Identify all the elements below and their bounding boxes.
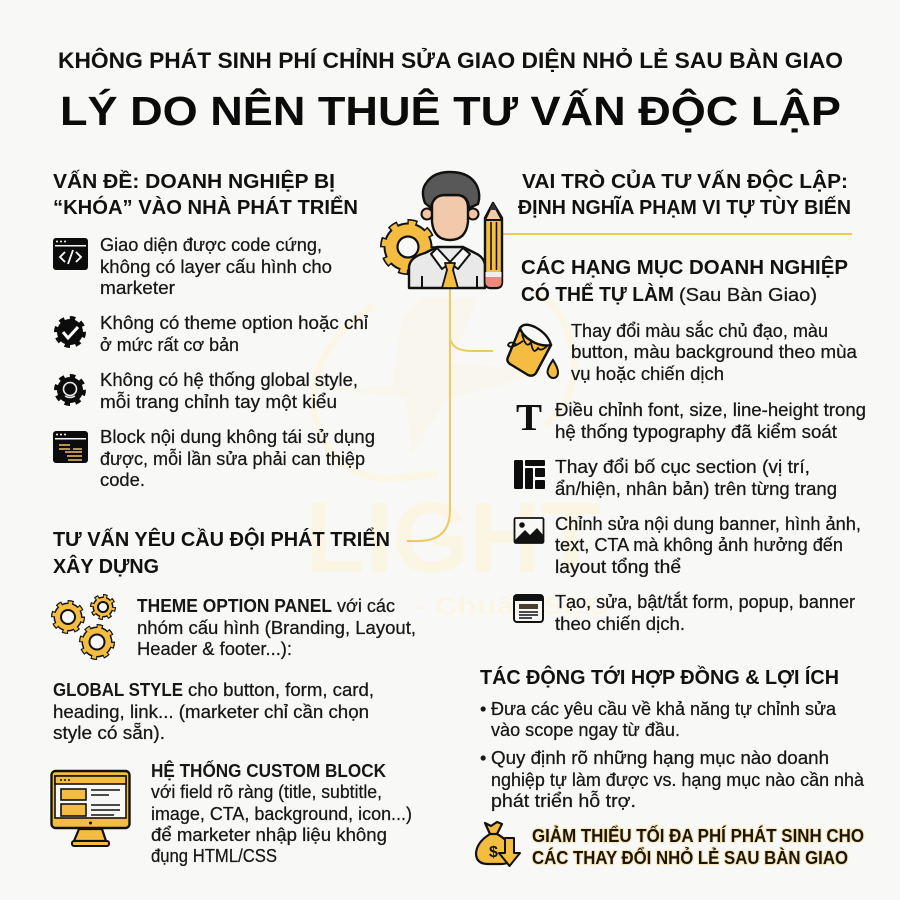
icon: paint bucket xyxy=(507,325,558,378)
watermark: brand logo xyxy=(305,290,610,620)
text: custom block system: để marketer nhập liệu không xyxy=(151,825,387,845)
text: custom block system: đụng HTML/CSS xyxy=(151,846,277,866)
text: hard-coded interface: không có layer cấu hình cho xyxy=(100,257,332,277)
text: banner content: text, CTA mà không ảnh hưởng đến xyxy=(555,535,843,555)
icon: money bag with down arrow: $ xyxy=(489,844,498,861)
bullet list: contract benefits: phát triển hỗ trợ. xyxy=(491,790,636,811)
text: theme option panel xyxy=(137,596,416,659)
heading: self-service items: (Sau Bàn Giao) xyxy=(679,285,817,305)
bullet list: contract benefits: • xyxy=(480,699,486,719)
text: no theme option: ở mức rất cơ bản xyxy=(100,335,239,355)
text: non-reusable blocks: code. xyxy=(100,470,145,490)
text: colours: vụ hoặc chiến dịch xyxy=(571,364,724,384)
icon: desktop monitor xyxy=(52,771,130,846)
text: theme option panel: Header & footer...): xyxy=(137,639,292,659)
heading: problem: VẤN ĐỀ: DOANH NGHIỆP BỊ xyxy=(53,169,335,193)
text: colours xyxy=(571,320,858,384)
text: global style: GLOBAL STYLE xyxy=(53,680,183,700)
icon: block layout window xyxy=(53,431,88,463)
watermark: brand logo: LIGHT xyxy=(305,482,601,594)
text: hard-coded interface: marketer xyxy=(100,278,175,298)
icon: gear support xyxy=(56,376,84,404)
text: colours: button, màu background theo mùa xyxy=(571,342,858,362)
text: global style: cho button, form, card, xyxy=(188,680,374,700)
text: custom block system xyxy=(151,760,412,866)
title: KHÔNG PHÁT SINH PHÍ CHỈNH SỬA GIAO DIỆN NHỎ LẺ SAU BÀN GIAO xyxy=(58,48,843,73)
text: hard-coded interface: Giao diện được code cứng, xyxy=(100,235,322,255)
callout: reduce extra fees: CÁC THAY ĐỔI NHỎ LẺ SAU BÀN GIAO xyxy=(532,847,848,868)
title: LÝ DO NÊN THUÊ TƯ VẤN ĐỘC LẬP xyxy=(60,88,841,134)
text: hard-coded interface xyxy=(100,235,332,298)
connector lines xyxy=(407,234,852,541)
icon: three gears xyxy=(54,596,114,658)
icon: layout grid xyxy=(514,460,545,489)
heading: dev team requirements: TƯ VẤN YÊU CẦU ĐỘI PHÁT TRIỂN xyxy=(53,527,390,551)
icon: money bag with down arrow xyxy=(476,822,520,866)
title xyxy=(58,48,843,134)
heading: consultant role xyxy=(518,169,851,219)
text: custom block system: với field rõ ràng (title, subtitle, xyxy=(151,782,382,802)
callout: reduce extra fees: GIẢM THIỂU TỐI ĐA PHÍ PHÁT SINH CHO xyxy=(532,825,864,846)
text: banner content: Chỉnh sửa nội dung banner, hình ảnh, xyxy=(555,514,861,534)
text: custom block system: image, CTA, background, icon...) xyxy=(151,804,412,824)
bullet list: contract benefits: • xyxy=(480,748,486,768)
text: global style xyxy=(53,680,374,743)
text: colours: Thay đổi màu sắc chủ đạo, màu xyxy=(571,320,828,341)
text: form popup: Tạo, sửa, bật/tắt form, popup, banner xyxy=(555,591,855,612)
text: non-reusable blocks: Block nội dung không tái sử dụng xyxy=(100,427,375,447)
icon: form window xyxy=(514,595,543,622)
text: non-reusable blocks: được, mỗi lần sửa phải can thiệp xyxy=(100,448,365,469)
callout: reduce extra fees: CÁC THAY ĐỔI NHỎ LẺ SAU BÀN GIAO xyxy=(532,847,848,868)
text: layout: Thay đổi bố cục section (vị trí, xyxy=(555,457,810,477)
heading: self-service items xyxy=(521,255,848,306)
text: no theme option xyxy=(100,313,368,355)
watermark: brand logo: - Chuẩn SEO xyxy=(415,593,610,620)
text: banner content: layout tổng thể xyxy=(555,557,681,577)
heading: problem xyxy=(53,169,358,219)
text: form popup xyxy=(555,591,855,634)
icon: code window xyxy=(53,238,88,270)
heading: self-service items: CÁC HẠNG MỤC DOANH NGHIỆP xyxy=(521,255,848,279)
text: no global style xyxy=(100,370,358,412)
heading: problem: “KHÓA” VÀO NHÀ PHÁT TRIỂN xyxy=(53,195,358,219)
bullet list: contract benefits: Đưa các yêu cầu về khả năng tự chỉnh sửa xyxy=(491,699,837,719)
bullet list: contract benefits xyxy=(480,699,865,811)
text: typography: hệ thống typography đã kiểm soát xyxy=(555,422,837,442)
text: form popup: theo chiến dịch. xyxy=(555,614,685,634)
text: theme option panel: THEME OPTION PANEL xyxy=(137,596,332,616)
text: typography xyxy=(555,400,866,442)
text: no theme option: Không có theme option hoặc chỉ xyxy=(100,313,368,333)
bullet list: contract benefits: Quy định rõ những hạng mục nào doanh xyxy=(491,748,829,768)
bullet list: contract benefits: vào scope ngay từ đầu. xyxy=(491,720,680,740)
icon: image xyxy=(514,518,544,543)
text: non-reusable blocks xyxy=(100,427,375,490)
heading: dev team requirements xyxy=(53,527,390,578)
callout: reduce extra fees: GIẢM THIỂU TỐI ĐA PHÍ PHÁT SINH CHO xyxy=(532,825,864,846)
text: global style: style có sẵn). xyxy=(53,723,165,743)
text: no global style: mỗi trang chỉnh tay một kiểu xyxy=(100,391,337,412)
icon: typography T: T xyxy=(516,397,542,439)
text: custom block system: HỆ THỐNG CUSTOM BLOCK xyxy=(151,760,386,781)
heading: self-service items: CÓ THỂ TỰ LÀM xyxy=(521,282,674,306)
heading: dev team requirements: XÂY DỰNG xyxy=(53,554,159,578)
text: no global style: Không có hệ thống global style, xyxy=(100,370,358,390)
text: global style: heading, link... (marketer chỉ cần chọn xyxy=(53,702,369,722)
heading: consultant role: VAI TRÒ CỦA TƯ VẤN ĐỘC LẬP: xyxy=(522,169,848,193)
heading: consultant role: ĐỊNH NGHĨA PHẠM VI TỰ TÙY BIẾN xyxy=(518,195,851,219)
text: layout xyxy=(555,457,837,499)
text: typography: Điều chỉnh font, size, line-height trong xyxy=(555,400,866,420)
text: layout: ẩn/hiện, nhân bản) trên từng trang xyxy=(555,479,837,499)
heading: contract impact: TÁC ĐỘNG TỚI HỢP ĐỒNG & LỢI ÍCH xyxy=(480,665,839,689)
icon: gear check xyxy=(56,318,84,346)
icon: consultant with gear and pencil xyxy=(384,172,502,288)
text: theme option panel: nhóm cấu hình (Branding, Layout, xyxy=(137,618,416,638)
text: banner content xyxy=(555,514,861,577)
callout: reduce extra fees xyxy=(532,825,864,868)
bullet list: contract benefits: nghiệp tự làm được vs. hạng mục nào cần nhà xyxy=(491,770,865,790)
text: theme option panel: với các xyxy=(337,596,395,616)
